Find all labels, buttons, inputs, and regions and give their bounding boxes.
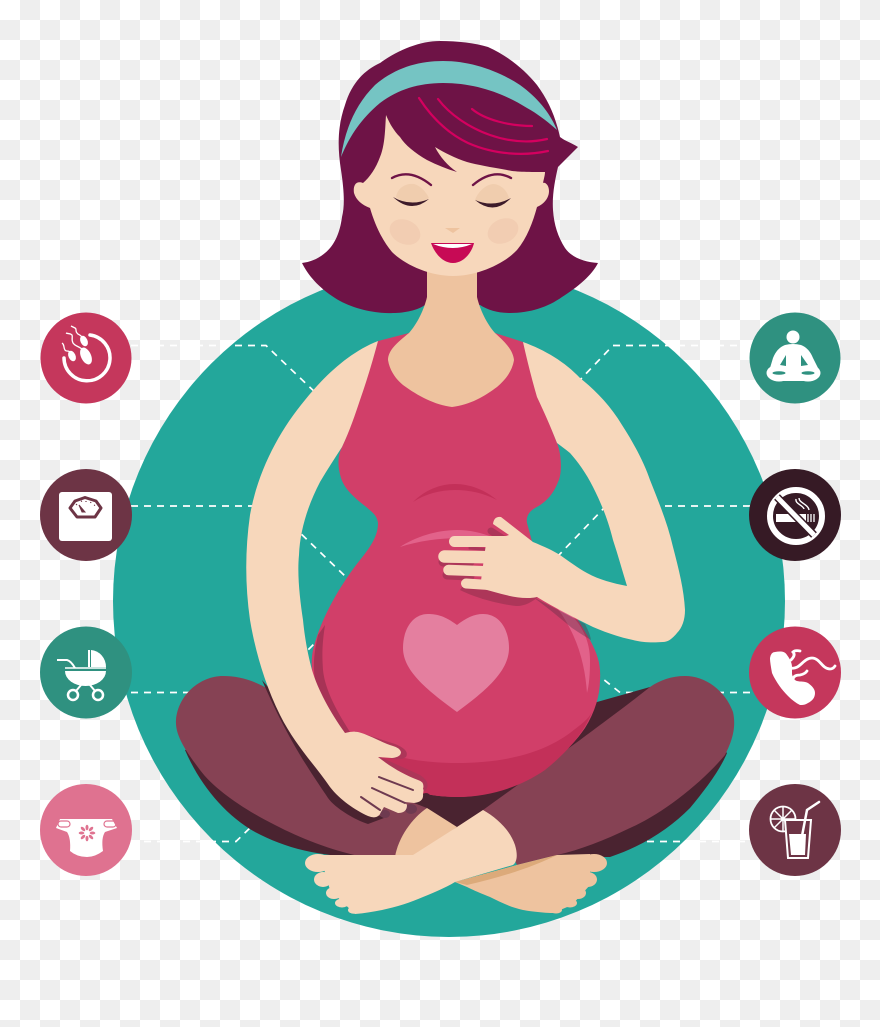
- left arm and hand: [246, 341, 424, 817]
- heart: [403, 614, 509, 712]
- right foot shadow: [455, 855, 557, 885]
- left hand fingertip shadows: [380, 793, 431, 818]
- icon: diaper: [40, 784, 132, 876]
- icon: no smoking: [749, 469, 841, 561]
- nose: [445, 228, 460, 233]
- icon: sperm timer: [40, 312, 132, 404]
- eyelids: [396, 184, 429, 203]
- right hand shadows on belly: [443, 531, 538, 606]
- closed eyes: [393, 197, 429, 206]
- crossed shin, far: [395, 808, 457, 857]
- dress and belly: [312, 333, 600, 797]
- icon: baby pram: [40, 626, 132, 718]
- icon: weighing scale: [40, 469, 132, 561]
- headband: [341, 61, 557, 157]
- icon: yoga figure: [750, 312, 840, 404]
- left foot and shin: [305, 810, 517, 914]
- arm shadow on belly: [533, 597, 591, 640]
- belly right highlight: [555, 605, 590, 693]
- hair back: [302, 41, 598, 313]
- mouth: [431, 243, 474, 263]
- cheeks: [385, 214, 425, 250]
- hair strands: [419, 98, 548, 154]
- face: [354, 115, 549, 276]
- right foot: [455, 854, 607, 914]
- teeth: [433, 244, 472, 248]
- icon: drink glass: [749, 784, 841, 876]
- fingers: [444, 542, 505, 586]
- arm shadow on leg: [262, 680, 384, 824]
- bust crease: [413, 484, 497, 502]
- left hand shadow on belly: [355, 731, 428, 792]
- belly top highlight: [400, 530, 492, 547]
- legs: [176, 676, 734, 865]
- head: [341, 61, 557, 276]
- belly lower shade: [343, 712, 592, 797]
- dashed connector lines: [131, 346, 750, 842]
- neck and chest: [388, 265, 514, 407]
- left hand finger lines: [361, 777, 413, 810]
- belly left rim: [314, 625, 352, 740]
- eyebrows: [392, 174, 511, 185]
- teal background circle: [113, 265, 785, 937]
- icon: fetus: [749, 626, 841, 718]
- right arm and hand: [444, 342, 685, 642]
